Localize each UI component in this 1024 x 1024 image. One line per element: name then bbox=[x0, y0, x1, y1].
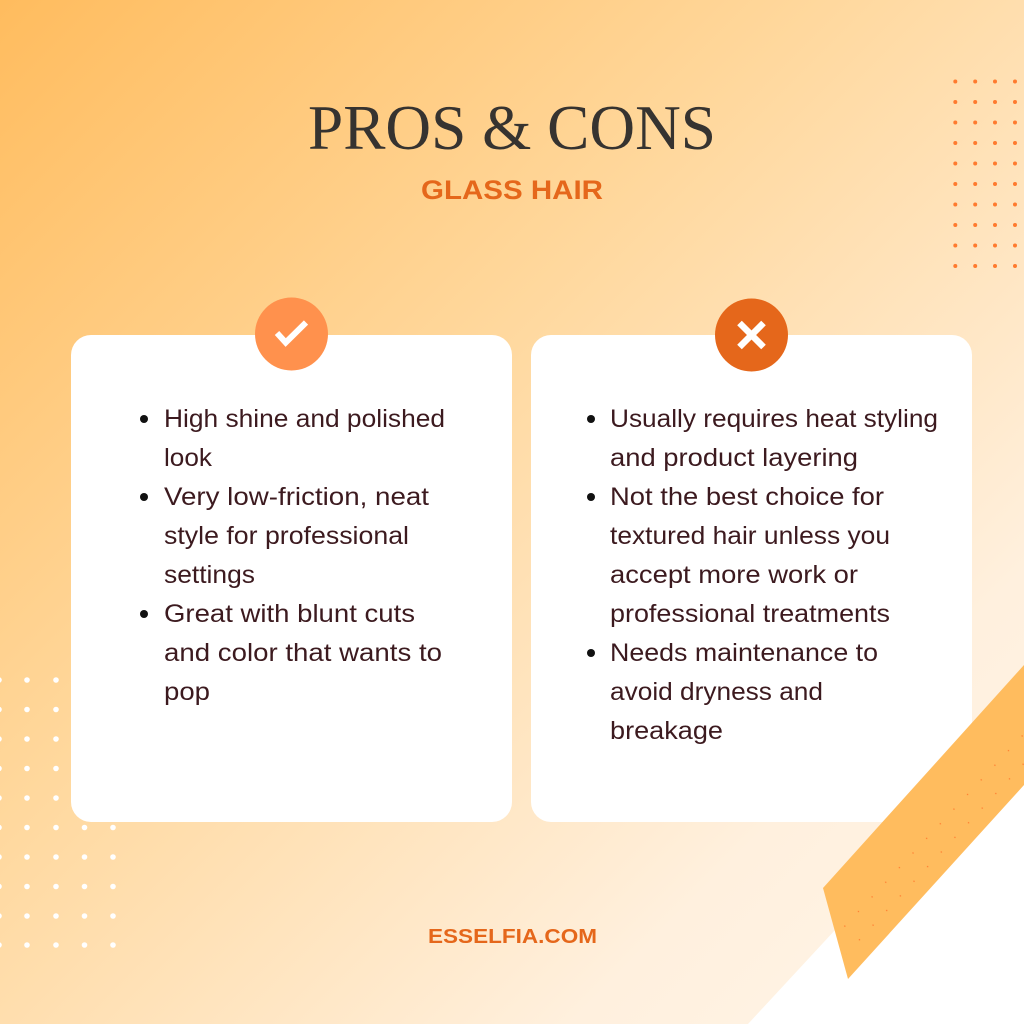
icon: check mark bbox=[255, 298, 328, 370]
cons list: textured hair unless you bbox=[610, 522, 890, 550]
cons list: Needs maintenance to bbox=[610, 639, 878, 667]
pros list: style for professional bbox=[164, 522, 409, 550]
white corner triangle bbox=[748, 726, 1024, 1024]
cons card background bbox=[531, 335, 972, 822]
pros list: look bbox=[164, 444, 213, 472]
pros list: Very low-friction, neat bbox=[164, 483, 429, 511]
cons list: breakage bbox=[610, 717, 723, 745]
orange dot grid top right bbox=[953, 80, 1017, 268]
panel: pros bbox=[71, 298, 512, 822]
cons list: Usually requires heat styling bbox=[610, 405, 938, 433]
pros list: and color that wants to bbox=[164, 639, 442, 667]
icon: cross mark bbox=[715, 298, 788, 372]
cons list: Not the best choice for bbox=[610, 483, 884, 511]
pros list: pop bbox=[164, 678, 210, 706]
pros list bbox=[140, 405, 445, 706]
cons list: professional treatments bbox=[610, 600, 890, 628]
footer website: ESSELFIA.COM bbox=[428, 926, 597, 948]
cons list: avoid dryness and bbox=[610, 678, 823, 706]
cons list bbox=[587, 405, 938, 745]
title: PROS & CONS bbox=[308, 92, 716, 163]
pros card background bbox=[71, 335, 512, 822]
pros list: settings bbox=[164, 561, 255, 589]
pros list: High shine and polished bbox=[164, 405, 445, 433]
white dot grid bottom left bbox=[0, 677, 116, 948]
cons list: accept more work or bbox=[610, 561, 858, 589]
subtitle: GLASS HAIR bbox=[421, 175, 603, 205]
cons list: and product layering bbox=[610, 444, 858, 472]
ribbon shape with fine dots bbox=[823, 665, 1024, 979]
panel: cons bbox=[531, 298, 972, 822]
pros list: Great with blunt cuts bbox=[164, 600, 415, 628]
